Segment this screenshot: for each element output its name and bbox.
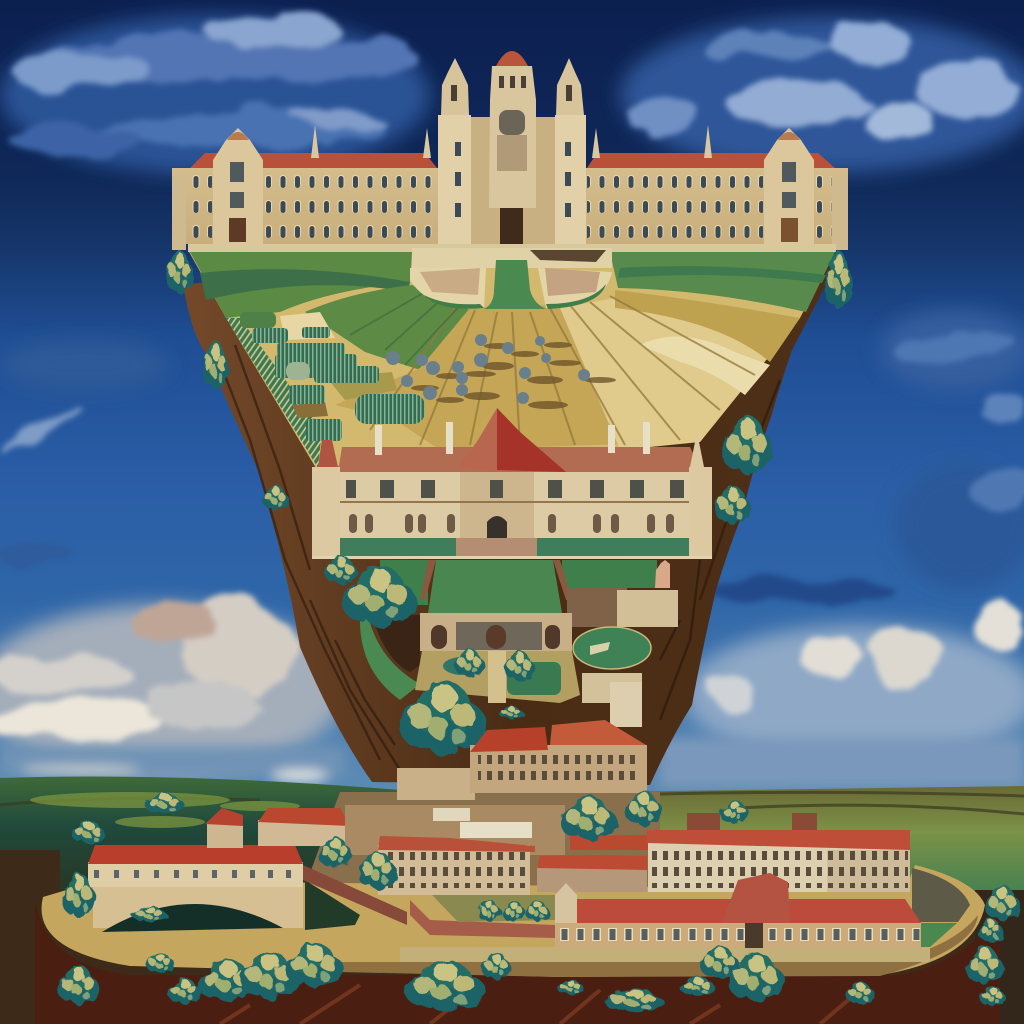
middle palace lower arches [349,514,674,533]
top palace [172,51,848,250]
terrace central lawn [428,560,562,613]
orchard tree shadows [411,342,616,409]
brown hollow behind walk [372,615,420,672]
left terrace lawn [380,560,428,605]
right town palace [647,813,910,892]
palace right roof [587,153,835,168]
front door [745,923,763,948]
left dark soil [0,850,60,1024]
field base [188,250,835,468]
left green fan [305,285,470,370]
green upper right field [610,252,835,312]
small tree right [499,706,524,719]
middle palace upper windows [346,480,684,498]
gable left face [458,408,500,472]
palace windows [650,848,908,888]
soil streaks [220,985,860,1024]
cliff root streaks [215,345,780,770]
vineyard strip [226,318,322,468]
yellow centre fan [335,302,690,450]
right edge foliage [825,251,853,310]
floating island cliff [183,245,840,785]
palace left tower [438,58,471,245]
cream dunes [640,336,770,395]
palace roof [647,830,910,850]
clouds: upper left [10,14,420,156]
terraced field [188,244,836,468]
lower terrace gardens [166,251,853,756]
middle palace roof [338,447,702,472]
front right palace [555,873,921,948]
road pale band [400,947,930,962]
white balustrades [433,808,470,821]
center green path [484,260,546,309]
garden beyond bridge [305,880,360,930]
central bay [460,472,534,538]
formal garden [415,651,580,703]
palace left roof [190,153,437,168]
arcaded building [420,613,572,651]
clouds: upper right [626,22,1015,140]
middle palace [312,408,712,559]
small roofed houses behind [205,808,350,848]
right dark soil [975,890,1024,1024]
garden pond left [443,657,483,675]
plain light patches [30,792,300,828]
greenhouse rows [240,312,425,441]
front gate [722,873,790,923]
palace spires [311,125,712,158]
fence wall [303,865,407,925]
left bridge building [88,845,360,932]
foot buildings [397,720,647,800]
palace right pavilion [764,128,848,250]
cliff shrub left lower [263,486,289,511]
corner pavilion [555,883,577,923]
ground plain [0,776,1024,1024]
clouds: horizon haze left [0,746,345,782]
clouds: horizon haze right [660,738,1024,788]
middle palace left tower [312,440,340,558]
palace window rows [190,172,832,242]
sky background [0,0,1024,800]
tower block [582,673,642,703]
lower platform road [42,865,985,977]
lower platform soil [35,900,1000,1024]
left edge foliage [166,251,194,294]
right curved wall and lawn [912,868,970,947]
clouds: lower left [0,595,300,742]
upper storey band [340,501,690,503]
middle palace door [487,516,507,538]
clouds: lower right [704,595,1024,710]
white building [378,845,530,895]
bridge arch opening [102,904,283,932]
middle palace right tower [689,432,712,558]
gable right face [497,408,566,472]
trees around the town [62,791,750,922]
bridge wall [93,885,303,928]
right town row [537,866,647,892]
terrace tree [400,682,487,756]
cliff right tree column [722,416,773,475]
dark green band left [200,269,410,300]
palace left pavilion [172,128,263,250]
right plain [600,786,1024,900]
gallery windows [94,870,291,878]
cliff shrub left upper [203,341,229,390]
clouds: middle right [710,332,1024,606]
garden tree right [505,651,534,682]
palace central door [500,208,523,244]
orchard trees [386,334,590,404]
gallery roof [88,845,303,864]
road front band [340,915,978,977]
palace body [648,842,910,892]
palace central tower [489,51,536,208]
pale field patch [280,312,335,340]
green upper left field [190,252,412,318]
town base ground [300,792,660,900]
front palace windows [556,923,920,947]
small garden tree [455,649,484,678]
left plain [0,776,400,900]
furrow lines [370,296,755,445]
front palace roof [558,899,921,923]
yellow-green patch [327,372,397,400]
fort wall [567,560,678,627]
palace right tower [555,58,586,245]
palace right annex [827,850,910,892]
ground base [0,795,1024,1024]
middle palace wall [340,472,690,538]
white building roof [378,836,535,852]
terrace bastions [410,248,612,309]
round lawn [573,627,651,669]
plain dark furrows [0,792,1024,814]
golden band right [615,290,800,362]
cliff right tree low [715,486,750,525]
middle palace terrace [312,538,712,559]
curved green walk [360,615,420,700]
front palace wall [555,922,921,948]
palace main wall [172,168,848,244]
white building windows [385,852,525,888]
palace central block [471,117,555,245]
round tower [610,682,642,727]
upper gallery [88,862,303,887]
inner lawn [432,895,555,922]
dark band right [618,266,826,283]
central town [303,805,648,938]
green fan lines [350,292,465,365]
trees along the soil edge [58,886,1020,1012]
back masonry [345,805,565,855]
garden lawn right [507,662,561,695]
lawn sculpture [590,642,610,655]
cream right fan [560,298,800,450]
garden tree big [342,566,417,627]
road edge wall [410,900,555,938]
soft cloud masses [0,15,1024,775]
right terrace lawn [562,560,657,588]
cream terrace strip [188,244,836,252]
clouds: middle left wisps [0,406,82,562]
middle palace chimneys [375,422,650,455]
palace towers [687,813,720,843]
garden stairs [488,651,506,703]
garden tree left [325,556,357,585]
lawn side paths [420,560,572,600]
